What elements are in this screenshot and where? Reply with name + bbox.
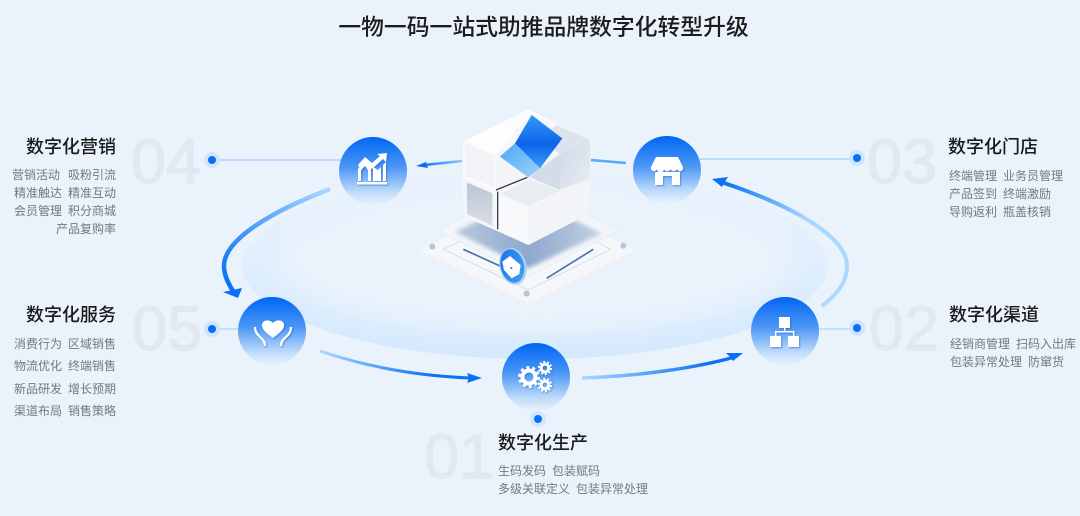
list: channel items: 防窜货 xyxy=(1028,354,1064,369)
list: channel items xyxy=(950,336,1076,369)
node: 03 digital store xyxy=(633,127,1063,219)
list: store items: 业务员管理 xyxy=(1003,168,1063,183)
list: marketing items: 吸粉引流 xyxy=(68,168,116,182)
arrow: 01 to 02 xyxy=(582,353,743,378)
number 04: 04 xyxy=(131,127,201,197)
number 05: 05 xyxy=(132,294,202,364)
dot marker xyxy=(204,321,220,337)
list: service items: 区域销售 xyxy=(68,336,116,351)
connector lines xyxy=(218,159,852,329)
list: store items: 终端管理 xyxy=(949,168,997,183)
badge xyxy=(496,245,530,288)
list: marketing items: 积分商城 xyxy=(68,203,116,218)
list: production items: 生码发码 xyxy=(498,463,546,478)
dot marker xyxy=(204,152,220,168)
heading: channel: 数字化渠道 xyxy=(949,305,1039,325)
glass plate xyxy=(438,185,619,278)
list: marketing items: 产品复购率 xyxy=(56,221,116,236)
list: store items: 导购返利 xyxy=(949,204,997,219)
heading: service: 数字化服务 xyxy=(26,305,116,325)
icon: org chart xyxy=(751,297,819,365)
central isometric cube illustration xyxy=(420,109,635,310)
arrow: cube to 04 xyxy=(416,161,462,168)
list: production items: 包装异常处理 xyxy=(576,482,648,496)
list: store items: 终端激励 xyxy=(1003,186,1051,201)
list: store items xyxy=(949,168,1063,219)
list: service items: 销售策略 xyxy=(68,403,116,418)
heading: marketing: 数字化营销 xyxy=(26,137,116,157)
number 03: 03 xyxy=(867,127,937,197)
node: 05 digital service xyxy=(14,294,306,418)
icon: growth chart xyxy=(339,137,407,205)
platform base xyxy=(420,197,635,310)
list: service items: 增长预期 xyxy=(68,382,116,396)
node: 04 digital marketing xyxy=(12,127,407,236)
dot marker xyxy=(530,411,546,427)
list: service items xyxy=(14,336,116,418)
title: 一物一码一站式助推品牌数字化转型升级 xyxy=(338,14,749,40)
dot marker xyxy=(849,320,865,336)
list: service items: 终端销售 xyxy=(68,358,116,373)
cube stack xyxy=(463,109,590,245)
list: marketing items: 营销活动 xyxy=(12,168,60,182)
list: marketing items: 精准触达 xyxy=(14,186,62,200)
list: channel items: 包装异常处理 xyxy=(950,355,1022,369)
node: 02 digital channel xyxy=(751,294,1076,369)
list: channel items: 扫码入出库 xyxy=(1016,336,1076,351)
number 01: 01 xyxy=(424,422,494,492)
list: marketing items: 精准互动 xyxy=(68,186,116,200)
heading: production: 数字化生产 xyxy=(498,433,588,453)
list: production items xyxy=(498,463,648,496)
icon: storefront xyxy=(633,136,701,204)
list: channel items: 经销商管理 xyxy=(950,336,1010,351)
list: service items: 新品研发 xyxy=(14,381,62,396)
list: store items: 瓶盖核销 xyxy=(1003,205,1051,219)
list: service items: 物流优化 xyxy=(14,359,62,373)
list: marketing items: 会员管理 xyxy=(14,203,62,218)
arrow: 05 to 01 xyxy=(320,351,482,383)
node: 01 digital production xyxy=(424,343,648,496)
arrow: 02 to 03 xyxy=(712,177,847,306)
list: production items: 包装赋码 xyxy=(552,464,600,478)
list: service items: 渠道布局 xyxy=(14,404,62,418)
list: service items: 消费行为 xyxy=(14,337,62,351)
heading: store: 数字化门店 xyxy=(948,137,1038,157)
central glowing ellipse xyxy=(242,171,828,359)
line: 03 to cube xyxy=(591,160,626,163)
icon: heart in hands xyxy=(238,297,306,365)
list: marketing items xyxy=(12,168,116,236)
dot marker xyxy=(849,150,865,166)
number 02: 02 xyxy=(869,294,939,364)
icon: gears xyxy=(502,343,570,411)
list: store items: 产品签到 xyxy=(949,186,997,201)
arrow: 04 to 05 xyxy=(223,189,330,298)
list: production items: 多级关联定义 xyxy=(498,481,570,496)
